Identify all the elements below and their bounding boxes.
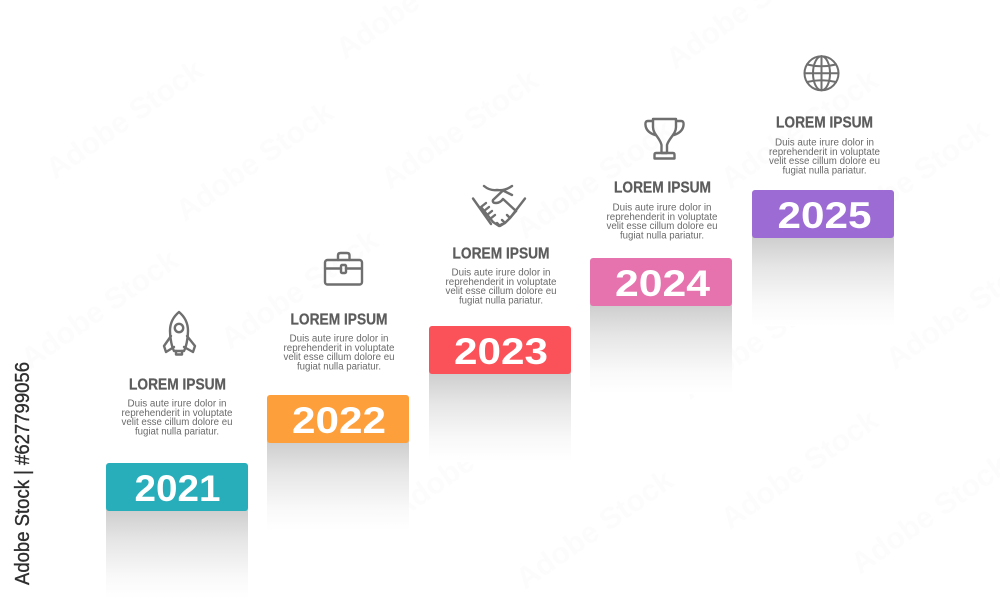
description: 2022: velit esse cillum dolore eu (284, 352, 394, 363)
watermark pattern: Adobe Stock (170, 95, 339, 228)
watermark pattern: Adobe Stock (215, 223, 384, 356)
watermark pattern: Adobe Stock (715, 63, 884, 196)
description: 2024: reprehenderit in voluptate (606, 212, 718, 223)
description: 2023: reprehenderit in voluptate (446, 277, 556, 288)
attribution: Adobe Stock | #627799056 (12, 362, 34, 585)
watermark pattern: Adobe Stock (825, 113, 994, 246)
description: 2024: Duis aute irure dolor in (612, 202, 712, 214)
description: 2022: Duis aute irure dolor in (290, 334, 388, 344)
year box: 2023 (429, 326, 571, 374)
icon: globe (804, 56, 838, 90)
description: 2021 (122, 398, 232, 438)
description: 2023: Duis aute irure dolor in (452, 268, 550, 278)
description: 2025: fugiat nulla pariatur. (782, 166, 866, 176)
step: 2023 (429, 186, 571, 462)
icon: handshake (473, 186, 525, 226)
step: 2024 (590, 119, 732, 394)
watermark pattern: Adobe Stock (715, 403, 884, 536)
step: 2022 (267, 253, 409, 531)
icon: briefcase (325, 253, 362, 284)
shadow: 2025 (752, 236, 894, 326)
watermark pattern: Adobe Stock (510, 463, 679, 596)
description: 2025: Duis aute irure dolor in (775, 138, 874, 148)
description: 2024: velit esse cillum dolore eu (606, 221, 718, 232)
heading: 2021: LOREM IPSUM (129, 376, 226, 394)
step: 2025 (752, 56, 894, 326)
icon: trophy (645, 119, 684, 158)
year box: 2023: 2023 (454, 331, 548, 372)
heading: 2024: LOREM IPSUM (614, 180, 711, 196)
watermark pattern: Adobe Stock (510, 113, 679, 246)
watermark pattern: Adobe Stock (15, 243, 184, 376)
description: 2023 (446, 268, 556, 306)
watermark pattern: Adobe Stock (40, 53, 209, 186)
step: 2021 (106, 312, 248, 599)
year box: 2024: 2024 (615, 263, 710, 304)
description: 2021: reprehenderit in voluptate (122, 408, 232, 419)
shadow: 2023 (429, 372, 571, 462)
year box: 2024 (590, 258, 732, 306)
year box: 2022 (267, 395, 409, 443)
watermark pattern: Adobe Stock (375, 63, 544, 196)
description: 2024: fugiat nulla pariatur. (620, 230, 704, 242)
description: 2021: velit esse cillum dolore eu (122, 417, 232, 428)
heading: 2023: LOREM IPSUM (452, 246, 550, 262)
icon: rocket (164, 312, 195, 354)
heading: 2022: LOREM IPSUM (290, 312, 388, 328)
shadow: 2022 (267, 441, 409, 531)
year box: 2025 (752, 190, 894, 238)
heading: 2025: LOREM IPSUM (776, 114, 873, 132)
description: 2023: fugiat nulla pariatur. (459, 296, 543, 306)
description: 2022 (284, 334, 394, 372)
year box: 2021 (106, 463, 248, 511)
year box: 2022: 2022 (292, 400, 386, 441)
description: 2021: fugiat nulla pariatur. (135, 426, 219, 438)
shadow: 2024 (590, 304, 732, 394)
description: 2022: reprehenderit in voluptate (284, 343, 394, 354)
description: 2024 (606, 202, 718, 242)
description: 2021: Duis aute irure dolor in (128, 398, 226, 410)
year box: 2021: 2021 (134, 468, 220, 509)
year box: 2025: 2025 (778, 195, 872, 236)
description: 2025 (769, 138, 880, 176)
description: 2025: reprehenderit in voluptate (769, 147, 880, 158)
watermark pattern: Adobe Stock (675, 273, 844, 406)
shadow: 2021 (106, 509, 248, 599)
description: 2025: velit esse cillum dolore eu (769, 156, 880, 167)
description: 2022: fugiat nulla pariatur. (297, 362, 381, 372)
watermark pattern: Adobe Stock (385, 393, 554, 526)
description: 2023: velit esse cillum dolore eu (446, 286, 556, 297)
